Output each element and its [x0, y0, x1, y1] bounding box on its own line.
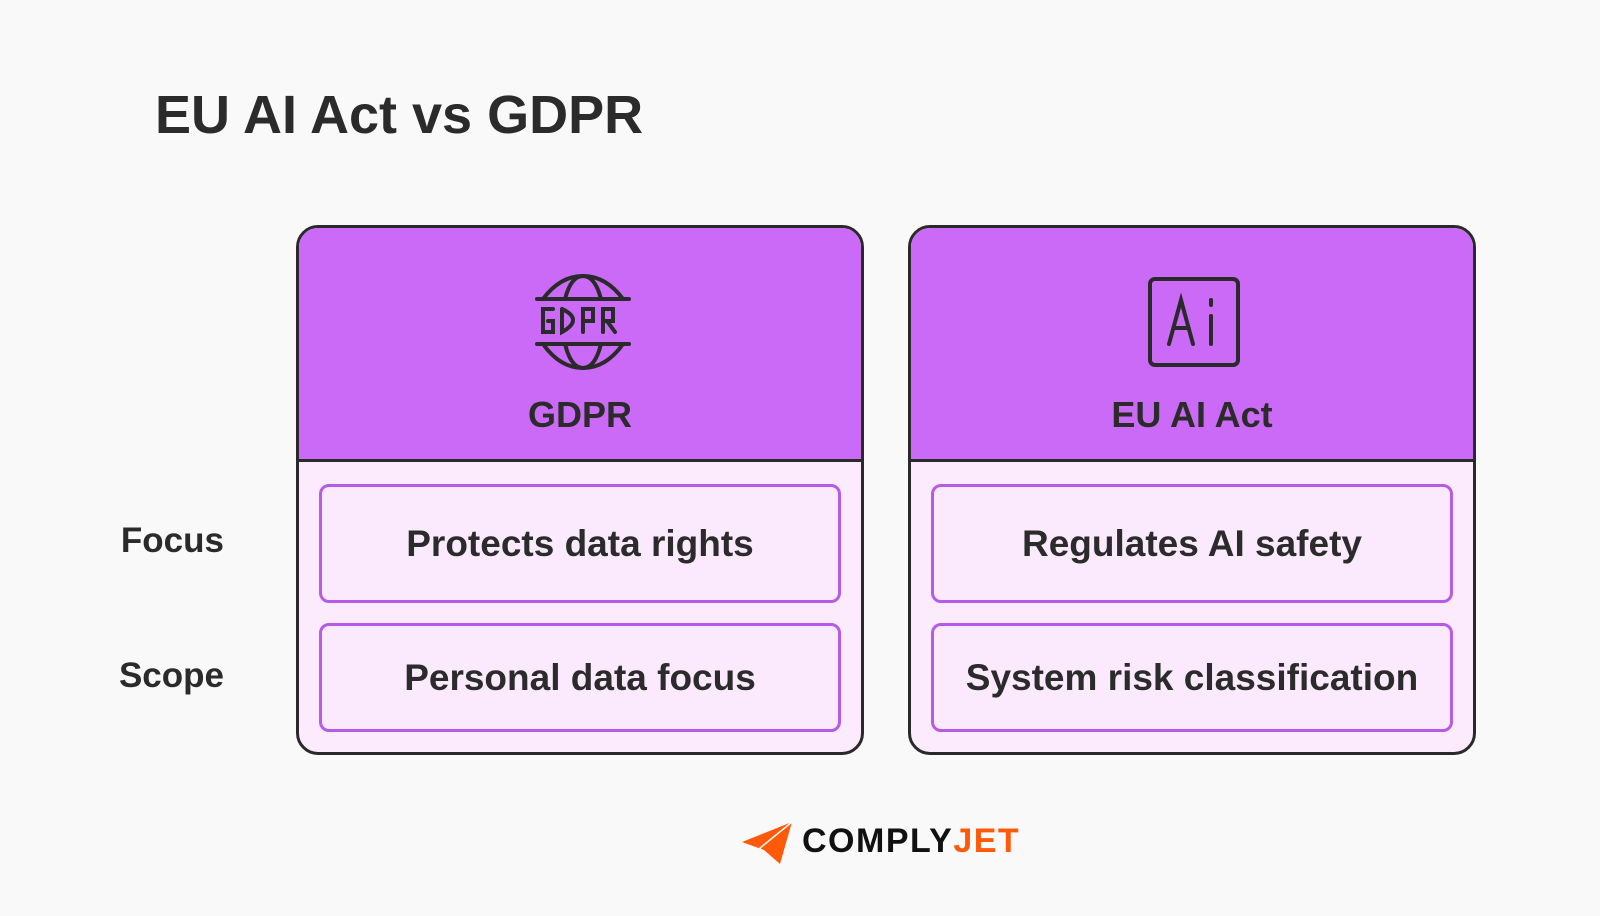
- row label: Scope: Scope: [119, 656, 224, 695]
- header: EU AI Act: EU AI Act: [1111, 394, 1273, 435]
- cell: focus: [931, 484, 1453, 603]
- icon: paper plane: [742, 822, 792, 864]
- icon: GDPR globe: [535, 274, 631, 370]
- header: GDPR: GDPR: [528, 394, 632, 435]
- cell: scope: [319, 623, 841, 732]
- cell: focus: Regulates AI safety: [1022, 522, 1362, 564]
- cell: focus: [319, 484, 841, 603]
- cell: focus: Protects data rights: [406, 522, 754, 564]
- panel: EU AI Act: [908, 225, 1476, 755]
- row label: Focus: Focus: [121, 521, 224, 560]
- cell: scope: [931, 623, 1453, 732]
- header: EU AI Act: [911, 228, 1473, 462]
- logo: ComplyJet: COMPLYJET: [802, 822, 1020, 860]
- icon: AI box: [1148, 277, 1240, 367]
- cell: scope: System risk classification: [966, 656, 1418, 698]
- title: EU AI Act vs GDPR: [155, 85, 643, 145]
- cell: scope: Personal data focus: [404, 656, 756, 698]
- panel: GDPR: [296, 225, 864, 755]
- header: GDPR: [299, 228, 861, 462]
